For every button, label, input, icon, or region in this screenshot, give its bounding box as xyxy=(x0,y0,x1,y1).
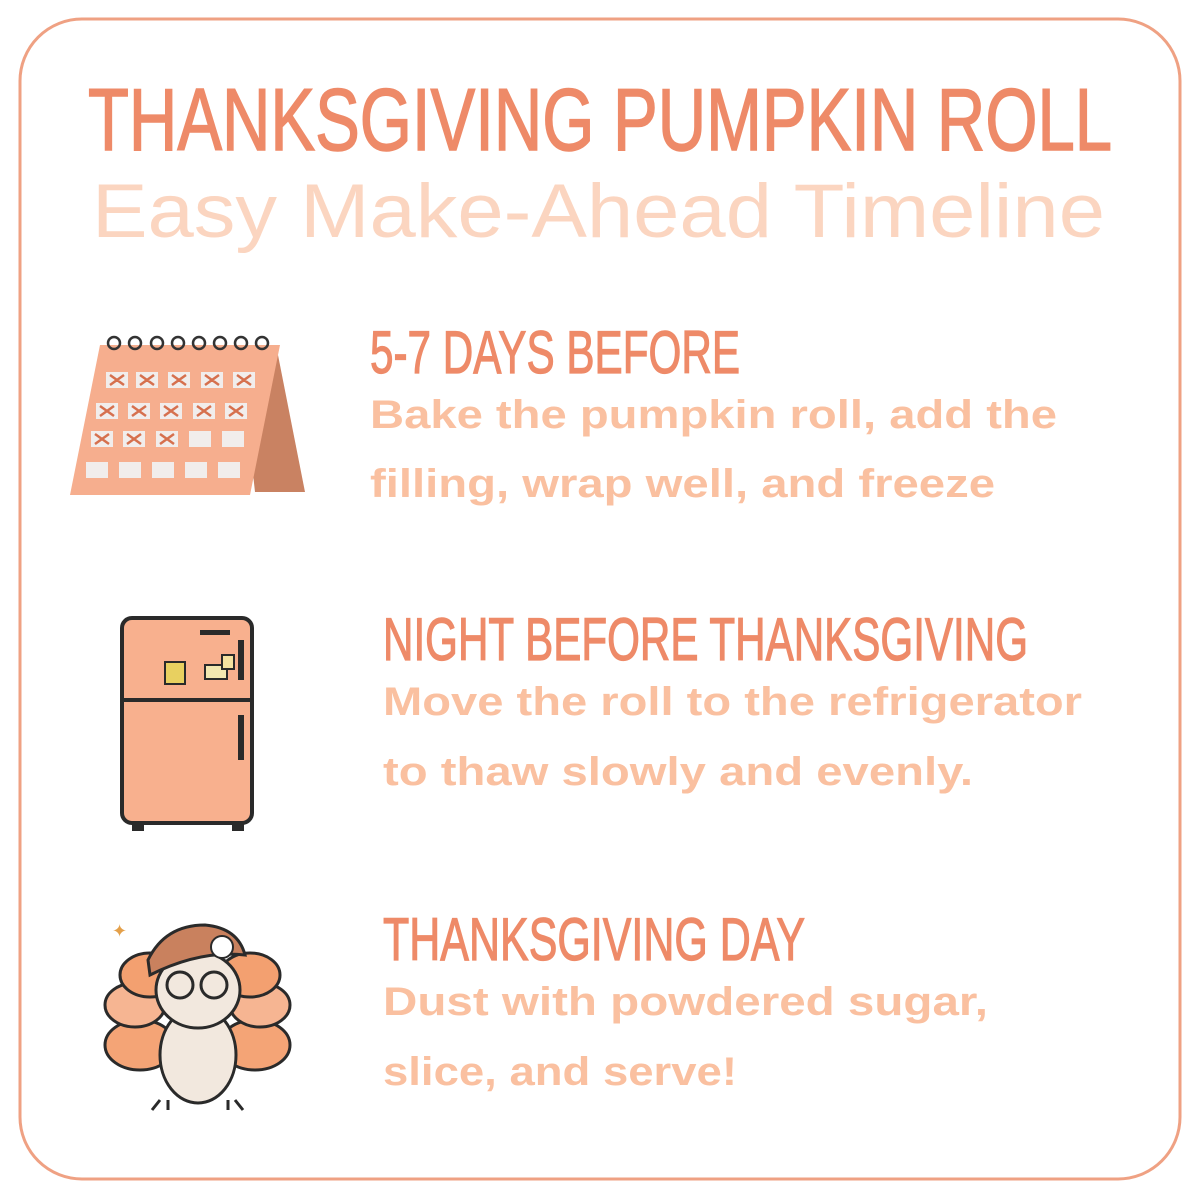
icon: turkey xyxy=(105,925,290,1110)
text: step 1: Bake the pumpkin roll, add the xyxy=(370,393,1057,437)
icon: calendar xyxy=(70,337,305,495)
heading: 5-7 days before: 5-7 DAYS BEFORE xyxy=(370,319,740,386)
text: step 2: to thaw slowly and evenly. xyxy=(383,750,973,794)
text: step 2: Move the roll to the refrigerator xyxy=(383,680,1082,724)
text: step 3: Dust with powdered sugar, xyxy=(383,980,988,1024)
subtitle: Easy Make-Ahead Timeline xyxy=(92,169,1105,254)
icon: refrigerator xyxy=(122,618,252,831)
text: step 2 xyxy=(383,680,1082,794)
text: step 1 xyxy=(370,393,1057,506)
text: step 3 xyxy=(383,980,988,1094)
heading: thanksgiving day: THANKSGIVING DAY xyxy=(383,906,805,973)
icon: sparkles: ✦ xyxy=(112,921,127,942)
text: step 1: filling, wrap well, and freeze xyxy=(370,462,995,506)
text: step 3: slice, and serve! xyxy=(383,1050,737,1094)
